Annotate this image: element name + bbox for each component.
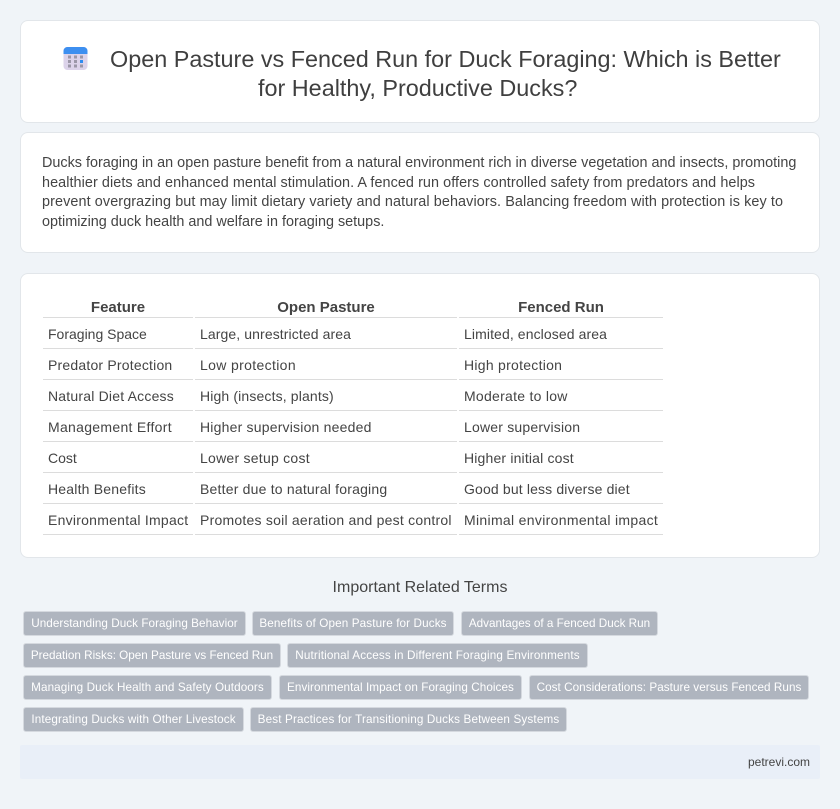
title — [110, 46, 781, 101]
related term chips: Managing Duck Health and Safety Outdoors — [31, 681, 264, 694]
related term chips: Advantages of a Fenced Duck Run — [469, 617, 650, 630]
comparison table: Low protection — [200, 357, 296, 373]
panel: introduction — [20, 132, 820, 253]
comparison table: Health Benefits — [48, 481, 146, 497]
comparison table: Predator Protection — [48, 357, 172, 373]
footer site name: petrevi.com — [748, 755, 810, 769]
comparison table: Foraging Space — [48, 326, 147, 342]
comparison table: Lower supervision — [464, 419, 580, 435]
comparison table: Higher initial cost — [464, 450, 574, 466]
intro text — [42, 155, 796, 230]
related term chips: Environmental Impact on Foraging Choices — [287, 681, 514, 694]
comparison table: Large, unrestricted area — [200, 326, 351, 342]
comparison table: High (insects, plants) — [200, 388, 334, 404]
comparison table: High protection — [464, 357, 562, 373]
related term chips: Nutritional Access in Different Foraging Environments — [295, 649, 580, 662]
related terms heading: Important Related Terms — [333, 579, 507, 596]
comparison table: Management Effort — [48, 419, 172, 435]
related term chips: Predation Risks: Open Pasture vs Fenced Run — [31, 649, 273, 662]
comparison table: Open Pasture — [277, 299, 375, 316]
header panel — [20, 20, 820, 123]
footer bar — [20, 745, 820, 779]
comparison table: Fenced Run — [518, 299, 604, 316]
intro text: prevent overgrazing but may limit dietary variety and natural behaviors. Balancing freedom with protection is key to — [42, 194, 783, 210]
comparison table: Feature — [91, 299, 145, 316]
comparison table: Limited, enclosed area — [464, 326, 607, 342]
title: Open Pasture vs Fenced Run for Duck Foraging: Which is Better — [110, 46, 781, 72]
related term chips — [23, 611, 809, 732]
related term chips: Understanding Duck Foraging Behavior — [31, 617, 238, 630]
comparison table: Promotes soil aeration and pest control — [200, 512, 452, 528]
comparison table: Moderate to low — [464, 388, 568, 404]
comparison table: Good but less diverse diet — [464, 481, 630, 497]
comparison table: Higher supervision needed — [200, 419, 372, 435]
related term chips: Integrating Ducks with Other Livestock — [31, 713, 236, 726]
comparison table: Cost — [48, 450, 77, 466]
comparison table: Minimal environmental impact — [464, 512, 658, 528]
panel: comparison table — [20, 273, 820, 558]
comparison table: Better due to natural foraging — [200, 481, 387, 497]
intro text: healthier diets and enhanced mental stimulation. A fenced run offers controlled safety from predators and helps — [42, 174, 755, 190]
related term chips: Best Practices for Transitioning Ducks Between Systems — [258, 713, 559, 726]
related term chips: Benefits of Open Pasture for Ducks — [259, 617, 447, 630]
comparison table: Natural Diet Access — [48, 388, 174, 404]
intro text: Ducks foraging in an open pasture benefit from a natural environment rich in diverse vegetation and insects, promoting — [42, 155, 796, 171]
related term chips: Cost Considerations: Pasture versus Fenced Runs — [537, 681, 801, 694]
comparison table — [43, 299, 663, 535]
comparison table: Environmental Impact — [48, 512, 188, 528]
intro text: optimizing duck health and welfare in foraging setups. — [42, 214, 384, 230]
title: for Healthy, Productive Ducks? — [258, 75, 577, 101]
icon: calendar — [64, 47, 88, 70]
comparison table: Lower setup cost — [200, 450, 310, 466]
